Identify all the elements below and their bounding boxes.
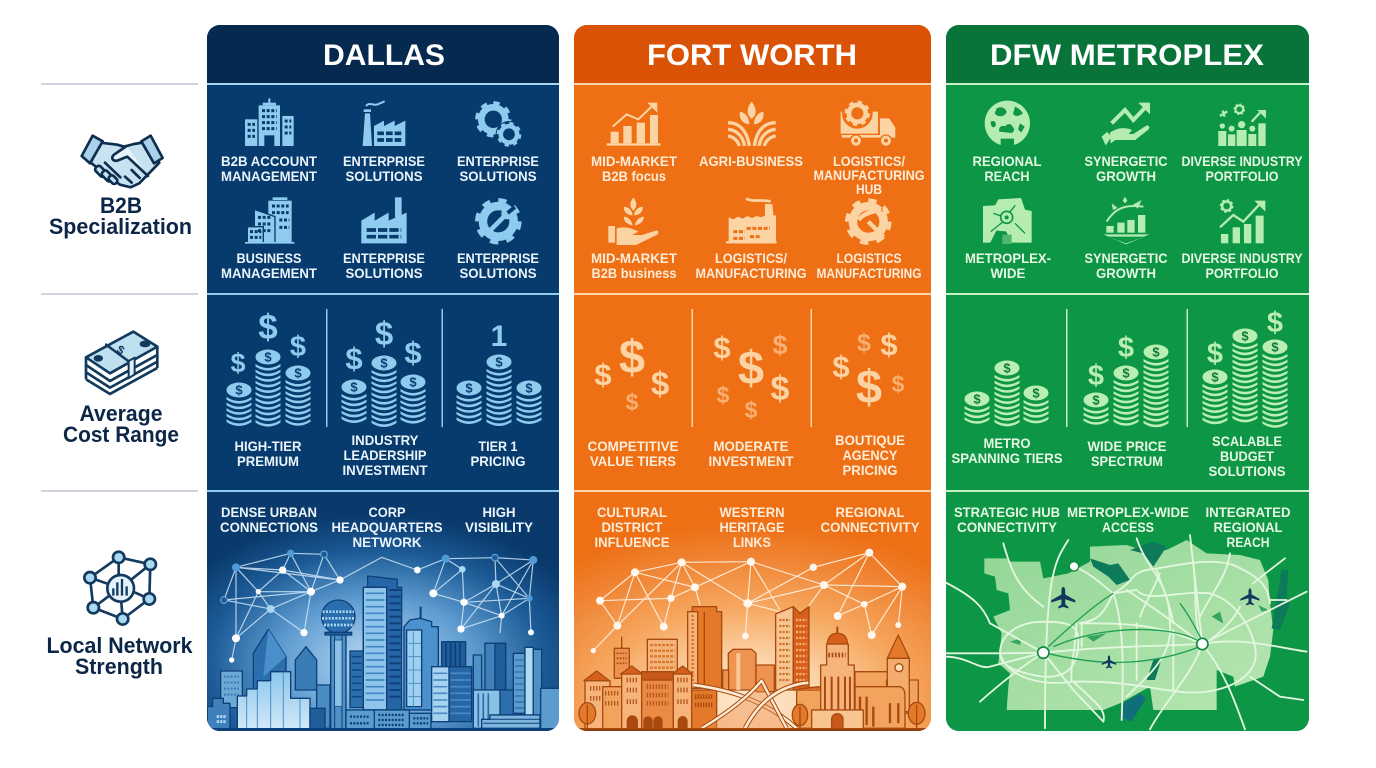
chart: scalable budget coin stacks: $ xyxy=(1241,328,1249,344)
icon: stack of money: $ xyxy=(114,342,127,358)
chart: high-tier coin stacks xyxy=(226,308,310,427)
chart: metro spanning coin stacks: $ xyxy=(973,392,981,406)
text: Fort Worth B2B labels: LOGISTICS xyxy=(836,250,902,266)
icon: synergetic chart xyxy=(1103,197,1149,244)
text: Fort Worth B2B labels: LOGISTICS/ xyxy=(833,153,905,169)
text: Fort Worth B2B labels: LOGISTICS/ xyxy=(715,250,787,266)
text: DFW B2B labels: SYNERGETIC xyxy=(1084,250,1168,266)
icon: factory with smoke xyxy=(363,101,405,146)
chart: wide price coin stacks: $ xyxy=(1092,392,1100,408)
chart: industry leadership coin stacks: $ xyxy=(409,374,417,390)
icon: moderate dollar signs: $ xyxy=(771,370,790,408)
chart: industry leadership coin stacks: $ xyxy=(404,335,422,370)
chart: wide price coin stacks: $ xyxy=(1152,344,1160,360)
chart: scalable budget coin stacks: $ xyxy=(1271,340,1279,354)
chart: tier 1 coin stacks xyxy=(456,320,542,426)
text: DFW B2B labels: GROWTH xyxy=(1096,265,1156,281)
chart: Fort Worth network xyxy=(591,549,906,653)
illustration: Dallas skyline xyxy=(207,576,561,733)
heading: B2B Specialization xyxy=(49,193,192,239)
icon: airport plane right xyxy=(1240,588,1259,605)
text: Fort Worth network labels: DISTRICT xyxy=(602,519,663,535)
icon: moderate dollar signs: $ xyxy=(713,330,731,365)
chart: metro spanning coin stacks: $ xyxy=(1003,360,1011,376)
chart: scalable budget coin stacks: $ xyxy=(1267,307,1283,339)
text: Fort Worth B2B labels: B2B business xyxy=(592,265,677,281)
text: DFW network labels: REGIONAL xyxy=(1214,519,1283,535)
text: DFW cost labels: WIDE PRICE xyxy=(1088,438,1166,454)
chart: high-tier coin stacks: $ xyxy=(258,308,278,347)
text: Dallas network labels: CORP xyxy=(368,504,406,520)
icon: boutique dollar signs: $ xyxy=(880,327,898,362)
heading: DFW Metroplex: DFW METROPLEX xyxy=(990,39,1264,72)
chart: wide price coin stacks: $ xyxy=(1122,366,1130,380)
chart: wide price coin stacks: $ xyxy=(1088,360,1104,392)
chart: scalable budget coin stacks: $ xyxy=(1211,370,1219,384)
icon: airport plane small xyxy=(1102,655,1116,669)
text: DFW network labels: REACH xyxy=(1226,534,1270,550)
icon: boutique dollar signs: $ xyxy=(857,329,871,357)
text: DFW cost labels: SPECTRUM xyxy=(1091,453,1163,469)
icon: factory xyxy=(361,197,407,243)
chart: scalable budget coin stacks xyxy=(1202,307,1288,428)
text: DFW B2B labels: DIVERSE INDUSTRY xyxy=(1182,250,1303,266)
icon: competitive dollar signs: $ xyxy=(619,330,645,383)
heading: Average Cost Range: Cost Range xyxy=(63,422,179,447)
text: DFW B2B labels: PORTFOLIO xyxy=(1206,168,1279,184)
text: DFW B2B labels: REACH xyxy=(984,168,1030,184)
text: B2B specialization labels: ENTERPRISE xyxy=(343,250,425,266)
section: B2B specialization icons xyxy=(245,98,522,244)
icon: airport plane large xyxy=(1051,587,1075,608)
icon: moderate dollar signs: $ xyxy=(772,330,788,360)
text: DFW cost labels xyxy=(952,433,1286,479)
heading: Average Cost Range xyxy=(63,401,179,447)
heading: B2B Specialization: Specialization xyxy=(49,214,192,239)
text: B2B specialization labels: ENTERPRISE xyxy=(457,250,539,266)
text: DFW network labels: METROPLEX-WIDE xyxy=(1067,504,1189,520)
heading: Fort Worth xyxy=(574,25,931,83)
chart: tier 1 coin stacks: $ xyxy=(495,354,503,370)
text: B2B specialization labels: MANAGEMENT xyxy=(221,265,317,281)
text: Fort Worth B2B labels: MANUFACTURING xyxy=(814,167,925,183)
map: DFW metroplex roads and airports xyxy=(946,492,1307,732)
text: Fort Worth cost labels xyxy=(588,436,904,475)
icon: moderate dollar signs: $ xyxy=(738,341,764,394)
chart: tier 1 coin stacks: 1 xyxy=(491,320,507,353)
icon: boutique dollar signs: $ xyxy=(832,349,850,384)
text: DFW network labels: INTEGRATED xyxy=(1206,504,1290,520)
icon: moderate dollar signs xyxy=(713,330,790,423)
icon: stack of money xyxy=(86,332,157,394)
panel: Dallas xyxy=(207,25,561,733)
heading: Dallas: DALLAS xyxy=(323,39,445,72)
chart: industry leadership coin stacks: $ xyxy=(380,356,388,370)
chart: wide price coin stacks: $ xyxy=(1118,332,1134,364)
text: B2B specialization labels: SOLUTIONS xyxy=(460,265,536,281)
heading: Local Network Strength xyxy=(46,633,193,679)
icon: handshake xyxy=(82,136,163,187)
text: Fort Worth cost labels: BOUTIQUE xyxy=(835,432,905,448)
icon: metro map xyxy=(983,198,1032,244)
text: Fort Worth network labels xyxy=(595,508,920,547)
heading: Fort Worth: FORT WORTH xyxy=(647,39,857,72)
text: Dallas cost labels: INVESTMENT xyxy=(342,462,428,478)
text: Fort Worth network labels: INFLUENCE xyxy=(594,534,670,550)
icon: competitive dollar signs: $ xyxy=(651,365,669,402)
text: DFW cost labels: METRO xyxy=(984,435,1031,451)
text: Dallas network labels: NETWORK xyxy=(352,534,422,550)
icon: competitive dollar signs: $ xyxy=(594,357,612,392)
text: DFW cost labels: BUDGET xyxy=(1220,448,1274,464)
icon: people and industries xyxy=(1218,104,1266,146)
section: Fort Worth cost range xyxy=(594,309,905,427)
icon: boutique dollar signs xyxy=(832,332,904,406)
text: B2B specialization labels: ENTERPRISE xyxy=(457,153,539,169)
text: Dallas cost labels: TIER 1 xyxy=(478,438,518,454)
chart: metro spanning coin stacks: $ xyxy=(1032,386,1040,400)
text: DFW B2B labels: METROPLEX- xyxy=(965,250,1051,266)
chart: high-tier coin stacks: $ xyxy=(294,366,302,380)
text: Fort Worth network labels: LINKS xyxy=(733,534,771,550)
text: Dallas cost labels: LEADERSHIP xyxy=(344,447,426,463)
heading: Local Network Strength: Local Network xyxy=(46,633,193,658)
text: DFW B2B labels: DIVERSE INDUSTRY xyxy=(1182,153,1303,169)
chart: scalable budget coin stacks: $ xyxy=(1207,338,1223,370)
icon: factory with smoke xyxy=(726,199,777,243)
chart: wide price coin stacks xyxy=(1084,332,1168,427)
text: Fort Worth network labels: REGIONAL xyxy=(836,504,905,520)
icon: competitive dollar signs: $ xyxy=(626,389,639,415)
text: Dallas network labels: CONNECTIONS xyxy=(220,519,318,535)
chart: industry leadership coin stacks xyxy=(342,315,426,427)
heading: Dallas xyxy=(207,25,559,83)
icon: agriculture xyxy=(728,102,776,146)
text: Fort Worth cost labels: VALUE TIERS xyxy=(590,453,676,469)
text: Dallas network labels: HEADQUARTERS xyxy=(332,519,442,535)
text: Fort Worth network labels: WESTERN xyxy=(720,504,784,520)
text: Fort Worth B2B labels: MANUFACTURING xyxy=(696,265,807,281)
icon: hand with growth arrow xyxy=(1102,103,1150,145)
icon: city blocks xyxy=(245,197,294,244)
icon: gear with tools xyxy=(848,202,888,242)
text: Fort Worth cost labels: INVESTMENT xyxy=(708,453,794,469)
icon: trend chart with gear xyxy=(1220,200,1265,243)
text: B2B specialization labels: SOLUTIONS xyxy=(346,168,422,184)
text: Dallas cost labels: PRICING xyxy=(470,453,526,469)
chart: high-tier coin stacks: $ xyxy=(230,348,246,378)
illustration: Fort Worth skyline xyxy=(574,607,931,732)
heading: B2B Specialization: B2B xyxy=(100,193,142,218)
icon: moderate dollar signs: $ xyxy=(745,397,758,423)
text: Dallas cost labels: PREMIUM xyxy=(237,453,299,469)
section: DFW B2B icons xyxy=(983,101,1266,244)
panel: Fort Worth xyxy=(574,25,931,732)
text: Fort Worth cost labels: PRICING xyxy=(842,462,898,478)
text: B2B specialization labels: SOLUTIONS xyxy=(460,168,536,184)
text: DFW B2B labels xyxy=(965,153,1303,281)
text: Dallas network labels: VISIBILITY xyxy=(465,519,534,535)
text: Fort Worth cost labels: MODERATE xyxy=(714,438,788,454)
text: Fort Worth network labels: HERITAGE xyxy=(720,519,784,535)
heading: Average Cost Range: Average xyxy=(80,401,162,426)
chart: high-tier coin stacks: $ xyxy=(290,331,306,363)
icon: moderate dollar signs: $ xyxy=(717,382,730,408)
panel: DFW Metroplex xyxy=(946,25,1309,732)
text: Dallas cost labels: INDUSTRY xyxy=(352,432,419,448)
text: B2B specialization labels: MANAGEMENT xyxy=(221,168,317,184)
chart: industry leadership coin stacks: $ xyxy=(345,341,363,376)
chart: tier 1 coin stacks: $ xyxy=(525,380,533,396)
icon: two gears xyxy=(478,104,522,148)
text: DFW network labels xyxy=(954,504,1290,550)
icon: network hub xyxy=(84,552,156,625)
icon: growth chart xyxy=(607,103,661,146)
text: Fort Worth B2B labels xyxy=(591,153,925,281)
text: Fort Worth cost labels: COMPETITIVE xyxy=(588,438,678,454)
heading: Local Network Strength: Strength xyxy=(75,654,163,679)
section: Fort Worth skyline and network xyxy=(574,531,931,731)
text: Fort Worth B2B labels: AGRI-BUSINESS xyxy=(699,153,803,169)
text: DFW network labels: STRATEGIC HUB xyxy=(954,504,1060,520)
text: DFW cost labels: SOLUTIONS xyxy=(1208,463,1286,479)
section: Fort Worth B2B icons xyxy=(607,98,895,245)
chart: metro spanning coin stacks xyxy=(964,360,1048,426)
chart: Dallas network xyxy=(221,550,537,663)
text: Fort Worth network labels: CONNECTIVITY xyxy=(820,519,920,535)
icon: boutique dollar signs: $ xyxy=(856,360,882,413)
icon: gear with wrench xyxy=(478,201,518,241)
text: DFW B2B labels: REGIONAL xyxy=(972,153,1042,169)
text: Dallas cost labels: HIGH-TIER xyxy=(234,438,302,454)
section: Dallas cost range xyxy=(226,308,542,427)
text: Dallas network labels xyxy=(220,508,533,547)
text: Fort Worth network labels: CULTURAL xyxy=(597,504,667,520)
icon: office buildings xyxy=(245,98,294,146)
text: B2B specialization labels: B2B ACCOUNT xyxy=(221,153,317,169)
chart: high-tier coin stacks: $ xyxy=(235,382,243,398)
text: B2B specialization labels xyxy=(221,153,539,281)
chart: high-tier coin stacks: $ xyxy=(264,350,272,364)
text: B2B specialization labels: ENTERPRISE xyxy=(343,153,425,169)
text: Fort Worth B2B labels: HUB xyxy=(856,181,882,197)
text: DFW B2B labels: PORTFOLIO xyxy=(1206,265,1279,281)
chart: tier 1 coin stacks: $ xyxy=(465,380,473,396)
text: DFW network labels: ACCESS xyxy=(1102,519,1154,535)
text: DFW B2B labels: GROWTH xyxy=(1096,168,1156,184)
chart: industry leadership coin stacks: $ xyxy=(350,380,358,394)
text: Fort Worth B2B labels: MID-MARKET xyxy=(591,153,677,169)
icon: plant in hand xyxy=(608,197,658,245)
icon: competitive dollar signs xyxy=(594,338,669,412)
section: Dallas skyline and network xyxy=(207,522,559,731)
text: Dallas network labels: HIGH xyxy=(482,504,516,520)
text: DFW network labels: CONNECTIVITY xyxy=(957,519,1058,535)
icon: truck with gear xyxy=(841,98,895,146)
heading: DFW Metroplex xyxy=(946,25,1309,83)
text: Fort Worth B2B labels: MANUFACTURING xyxy=(816,265,922,281)
text: Fort Worth B2B labels: B2B focus xyxy=(602,168,666,184)
text: B2B specialization labels: BUSINESS xyxy=(236,250,302,266)
text: DFW B2B labels: SYNERGETIC xyxy=(1084,153,1168,169)
section: DFW cost range xyxy=(964,307,1288,428)
text: DFW cost labels: SCALABLE xyxy=(1212,433,1282,449)
chart: industry leadership coin stacks: $ xyxy=(375,315,393,352)
text: Fort Worth cost labels: AGENCY xyxy=(842,447,898,463)
text: Fort Worth B2B labels: MID-MARKET xyxy=(591,250,677,266)
text: DFW B2B labels: WIDE xyxy=(990,265,1026,281)
icon: globe xyxy=(985,101,1030,146)
icon: boutique dollar signs: $ xyxy=(892,371,905,397)
text: B2B specialization labels: SOLUTIONS xyxy=(346,265,422,281)
text: DFW cost labels: SPANNING TIERS xyxy=(952,450,1062,466)
text: Dallas network labels: DENSE URBAN xyxy=(221,504,317,520)
text: Dallas cost labels xyxy=(235,436,525,475)
panel: row labels xyxy=(41,83,198,679)
